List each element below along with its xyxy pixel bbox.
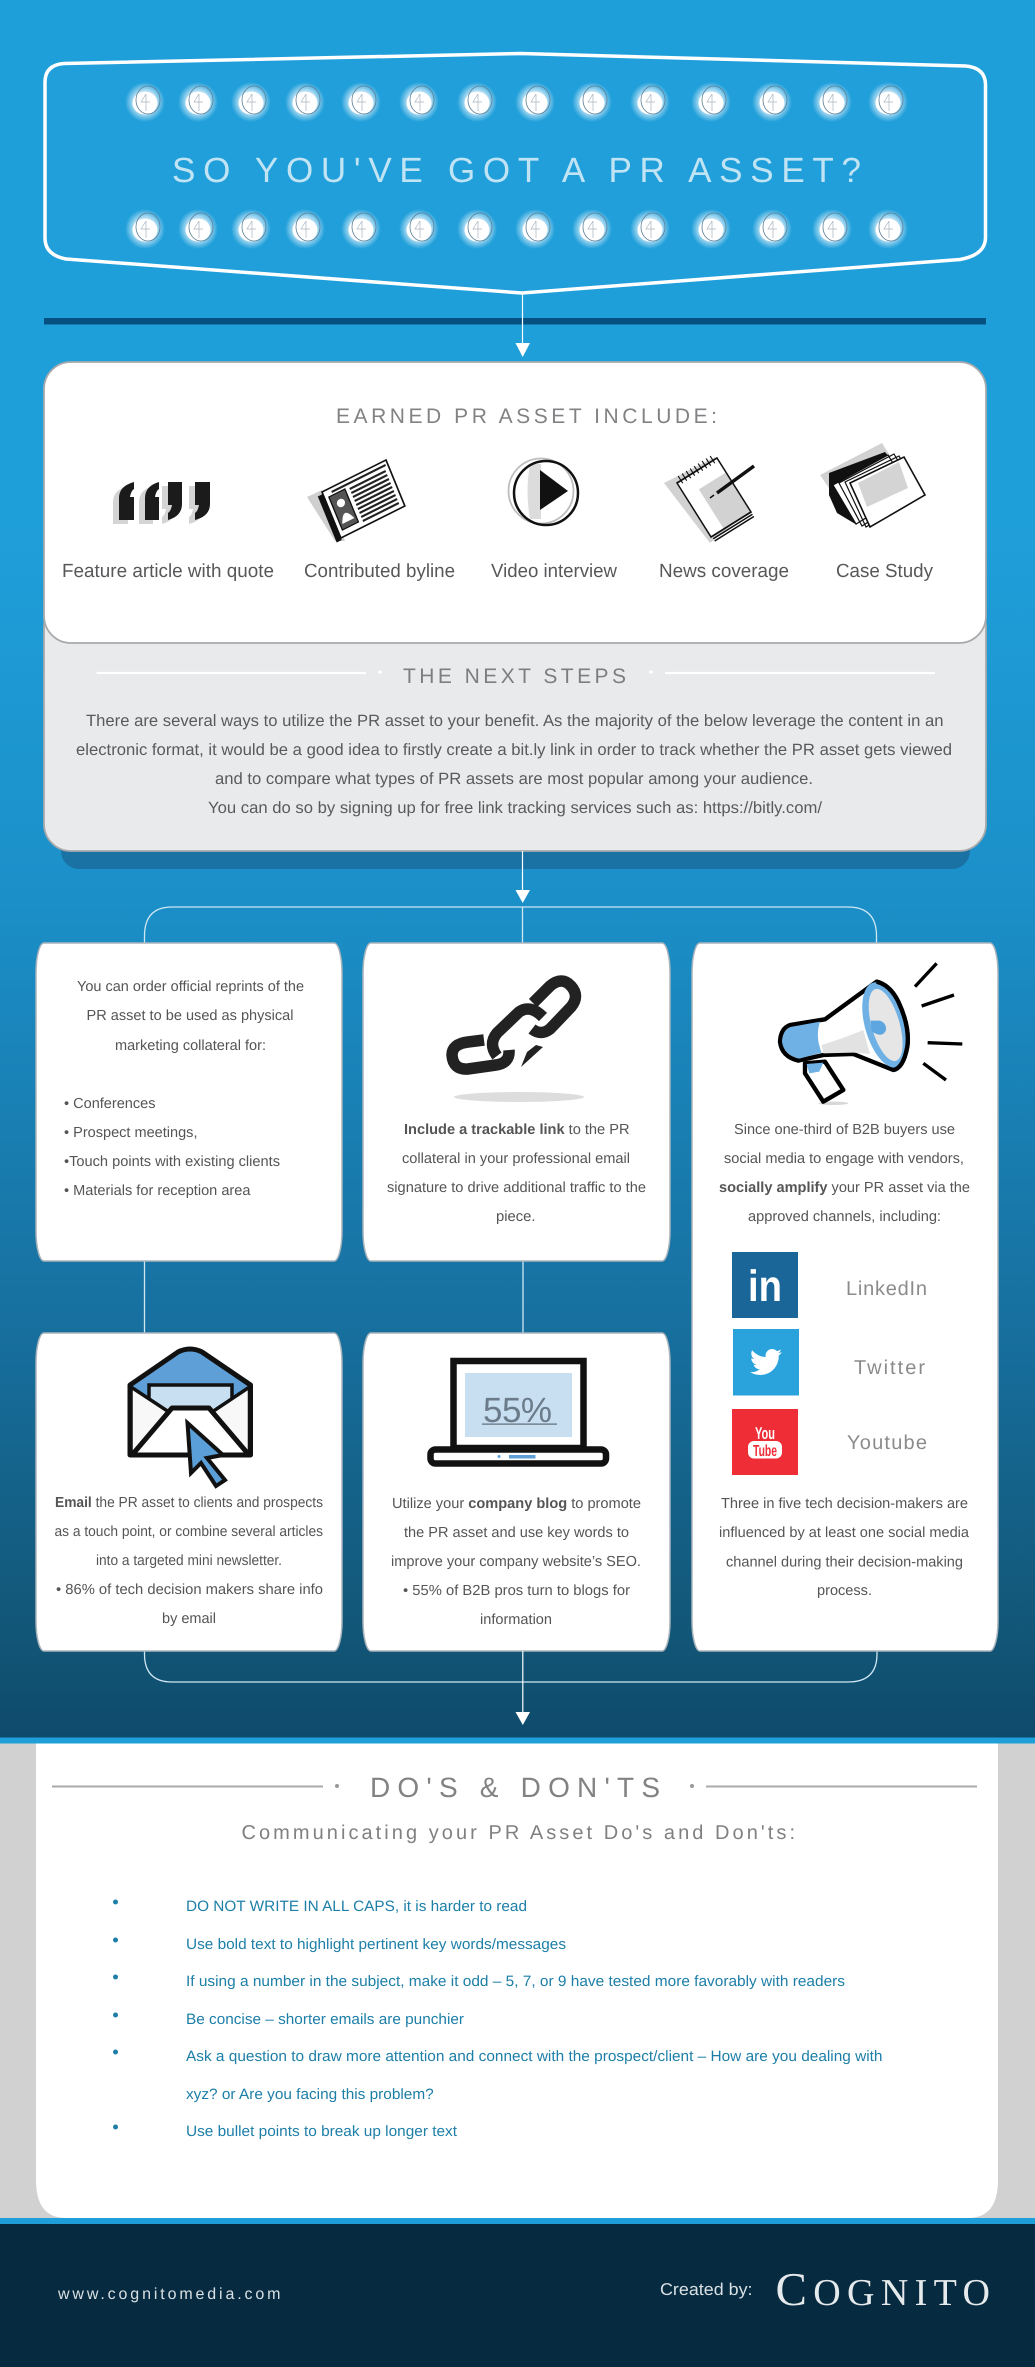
icon: notepad and pencil xyxy=(664,454,754,543)
text block: email: as a touch point, or combine several articles xyxy=(54,1524,323,1540)
icon: LinkedIn xyxy=(732,1252,798,1318)
icon: YouTube: Tube xyxy=(753,1443,777,1460)
label: Youtube: Youtube xyxy=(847,1432,927,1454)
text block: email: by email xyxy=(162,1611,216,1627)
card: official reprints xyxy=(36,943,342,1261)
icon: case study folder xyxy=(820,443,925,527)
list: communication tips: Ask a question to draw more attention and connect with the prospect/client – How are you dealing with xyxy=(186,2048,882,2065)
text block: email: into a targeted mini newsletter. xyxy=(96,1553,282,1569)
text block: company blog: the PR asset and use key words to xyxy=(404,1525,629,1541)
text block: next steps intro: and to compare what types of PR assets are most popular among your audience. xyxy=(215,770,813,788)
heading: the next steps xyxy=(96,665,935,688)
icon: YouTube xyxy=(732,1409,798,1475)
icon: chain link xyxy=(452,981,584,1102)
icon: Twitter xyxy=(733,1329,799,1396)
panel: do's and don'ts xyxy=(36,1743,998,2218)
label: contributed byline: Contributed byline xyxy=(304,561,455,582)
arrow: next steps to action cards xyxy=(516,851,530,903)
icon: LinkedIn: in xyxy=(748,1262,782,1311)
list: communication tips: If using a number in the subject, make it odd – 5, 7, or 9 have tested more favorably with readers xyxy=(186,1973,845,1990)
text block: trackable link: Include a trackable link to the PR xyxy=(404,1122,630,1138)
icon: megaphone xyxy=(780,963,962,1105)
text block: email: • 86% of tech decision makers share info xyxy=(56,1582,323,1598)
footer xyxy=(0,2218,1035,2367)
text block: socially amplify: Since one-third of B2B buyers use xyxy=(734,1122,955,1138)
text block: reprints intro: You can order official reprints of the xyxy=(77,979,304,995)
text block: email: Email the PR asset to clients and prospects xyxy=(55,1495,323,1511)
subheading: Communicating your PR Asset Do's and Don'ts: xyxy=(242,1822,795,1844)
list: communication tips xyxy=(113,1898,882,2140)
text block: three in five xyxy=(719,1496,970,1599)
text block: trackable link: collateral in your professional email xyxy=(402,1151,630,1167)
text block: email xyxy=(54,1495,323,1627)
text block: company blog xyxy=(391,1496,641,1628)
logo: Cognito: COGNITO xyxy=(776,2264,990,2316)
text block: next steps intro: There are several ways to utilize the PR asset to your benefit. As the majority of the below leverage the content in an xyxy=(86,712,944,730)
label: Twitter: Twitter xyxy=(854,1357,925,1379)
list: reprint uses: •Touch points with existing clients xyxy=(64,1154,280,1170)
panel: the next steps xyxy=(44,600,986,851)
list: reprint uses: • Conferences xyxy=(64,1096,156,1112)
list: reprint uses: • Materials for reception area xyxy=(64,1183,251,1199)
icon: YouTube: You xyxy=(755,1424,775,1443)
arrow: banner to earned assets xyxy=(516,293,530,357)
label: LinkedIn: LinkedIn xyxy=(846,1278,927,1300)
text block: next steps intro: You can do so by signing up for free link tracking services such as: https://bitly.com/ xyxy=(208,799,822,817)
card: email xyxy=(36,1333,342,1651)
heading: do's and don'ts: DO'S & DON'TS xyxy=(370,1772,660,1803)
icon: quotation marks xyxy=(113,482,210,524)
text block: socially amplify: socially amplify your PR asset via the xyxy=(719,1180,970,1196)
icon: laptop with 55%: 55% xyxy=(483,1391,552,1430)
list: communication tips: Be concise – shorter emails are punchier xyxy=(186,2011,464,2028)
card: company blog xyxy=(363,1333,670,1651)
website url: www.cognitomedia.com xyxy=(57,2286,280,2303)
text block: reprints intro: marketing collateral for: xyxy=(115,1038,266,1054)
icon: video play button xyxy=(508,458,578,525)
list: communication tips: DO NOT WRITE IN ALL CAPS, it is harder to read xyxy=(186,1898,527,1915)
list: communication tips: Use bold text to highlight pertinent key words/messages xyxy=(186,1936,566,1953)
banner: title sign xyxy=(45,54,986,293)
card: social media xyxy=(692,943,998,1651)
text block: three in five: channel during their decision-making xyxy=(726,1554,963,1570)
text block: three in five: influenced by at least one social media xyxy=(719,1525,970,1541)
heading: do's and don'ts xyxy=(52,1772,977,1803)
text block: three in five: Three in five tech decision-makers are xyxy=(721,1496,968,1512)
label: video interview: Video interview xyxy=(491,561,617,582)
text block: next steps intro xyxy=(76,712,952,817)
text block: company blog: Utilize your company blog to promote xyxy=(392,1496,641,1512)
heading: earned PR asset: EARNED PR ASSET INCLUDE: xyxy=(336,405,717,428)
side background of do's and don'ts section xyxy=(0,1743,1035,2219)
icon: newspaper xyxy=(307,460,406,542)
text block: socially amplify xyxy=(719,1122,970,1225)
list: communication tips: Use bullet points to break up longer text xyxy=(186,2123,458,2140)
heading: the next steps: THE NEXT STEPS xyxy=(403,665,626,688)
icon: envelope with cursor xyxy=(130,1349,250,1486)
shadow under next steps panel xyxy=(61,780,970,869)
text block: reprints intro xyxy=(77,979,304,1054)
list: reprint uses: • Prospect meetings, xyxy=(64,1125,198,1141)
label: feature article: Feature article with quote xyxy=(62,561,274,582)
page background xyxy=(0,0,1035,1738)
top row of light bulbs xyxy=(125,82,908,122)
list: reprint uses xyxy=(64,1096,280,1199)
text block: company blog: information xyxy=(480,1612,552,1628)
text block: socially amplify: social media to engage with vendors, xyxy=(724,1151,964,1167)
bottom row of light bulbs xyxy=(125,209,908,249)
icon: laptop with 55% xyxy=(430,1361,606,1464)
text block: next steps intro: electronic format, it would be a good idea to firstly create a bit.ly link in order to track whether the PR asset gets viewed xyxy=(76,741,952,759)
title: SO YOU'VE GOT A PR ASSET? xyxy=(172,151,861,190)
text block: reprints intro: PR asset to be used as physical xyxy=(86,1008,294,1024)
text block: three in five: process. xyxy=(817,1583,872,1599)
card: trackable link xyxy=(363,943,670,1261)
panel: earned PR asset include xyxy=(44,362,986,643)
list: communication tips: xyz? or Are you facing this problem? xyxy=(186,2086,434,2103)
dark divider bar xyxy=(44,318,986,324)
text block: trackable link xyxy=(387,1122,646,1225)
text block: socially amplify: approved channels, including: xyxy=(748,1209,941,1225)
text block: company blog: • 55% of B2B pros turn to blogs for xyxy=(403,1583,630,1599)
arrow: cards to do's and don'ts xyxy=(516,1651,530,1725)
text block: trackable link: piece. xyxy=(496,1209,536,1225)
connector lines between cards xyxy=(144,907,877,1682)
text block: trackable link: signature to drive additional traffic to the xyxy=(387,1180,646,1196)
label: case study: Case Study xyxy=(836,561,933,582)
text block: company blog: improve your company website’s SEO. xyxy=(391,1554,641,1570)
created by: Created by: xyxy=(660,2280,752,2299)
label: news coverage: News coverage xyxy=(659,561,789,582)
blue band above do's and don'ts xyxy=(0,1738,1035,1744)
